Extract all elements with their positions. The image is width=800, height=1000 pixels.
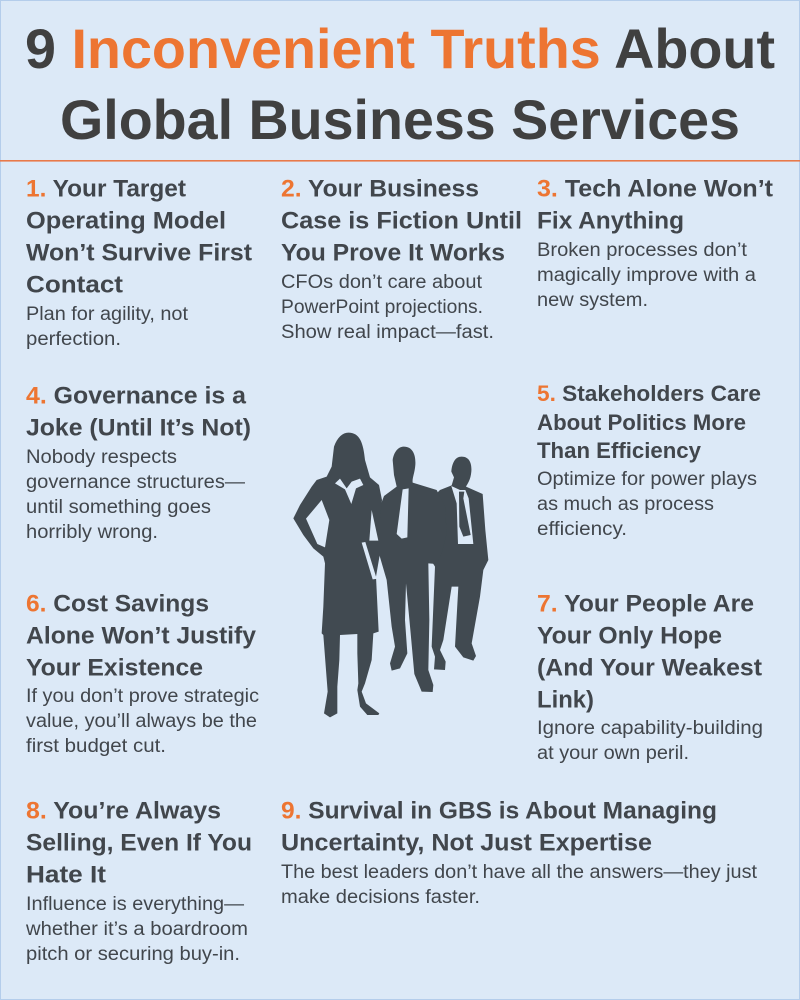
truth 2: You Prove It Works [281, 240, 505, 267]
title [25, 17, 775, 151]
right man's shirt and tie [451, 486, 473, 544]
truth 4: Nobody respects [26, 447, 177, 468]
woman's arm gap [369, 510, 378, 541]
truth 5 [537, 381, 761, 540]
truth 3 [537, 176, 773, 311]
truth 5: as much as process [537, 494, 714, 515]
truth 9: 9. Survival in GBS is About Managing [281, 798, 717, 825]
truth 6: 6. Cost Savings [26, 591, 209, 618]
truth 7 [537, 591, 763, 764]
truth 8: whether it’s a boardroom [25, 919, 248, 940]
truth 8: pitch or securing buy-in. [26, 944, 240, 965]
truth 2 [281, 176, 522, 343]
truth 2: 2. Your Business [281, 176, 479, 203]
truth 8: Hate It [26, 862, 106, 889]
truth 6: value, you’ll always be the [26, 711, 257, 732]
truth 7: Ignore capability-building [537, 718, 763, 739]
truth 1: Plan for agility, not [26, 304, 189, 325]
figure: woman in front [293, 433, 382, 717]
figure: man at back right [427, 457, 488, 670]
truth 1: Contact [26, 272, 123, 299]
truth 7: Link) [537, 687, 594, 714]
truth 8: Influence is everything— [26, 894, 244, 915]
truth 2: Case is Fiction Until [281, 208, 522, 235]
truth 6 [26, 591, 259, 757]
truth 4: governance structures— [26, 472, 245, 493]
centre man's tie [397, 488, 409, 539]
truth 5: Optimize for power plays [537, 469, 757, 490]
truth 4: horribly wrong. [26, 522, 158, 543]
truth 3: Broken processes don’t [537, 240, 748, 261]
truth 3: 3. Tech Alone Won’t [537, 176, 773, 203]
truth 4: Joke (Until It’s Not) [26, 415, 251, 442]
truth 7: at your own peril. [537, 743, 689, 764]
truth 8 [25, 798, 252, 965]
truth 3: new system. [537, 290, 648, 311]
truth 7: 7. Your People Are [537, 591, 754, 618]
truth 3: Fix Anything [537, 208, 684, 235]
truth 1: Won’t Survive First [26, 240, 252, 267]
figure: man in centre [375, 447, 447, 692]
folder edge [362, 542, 385, 579]
truth 3: magically improve with a [537, 265, 756, 286]
truth 2: CFOs don’t care about [281, 272, 483, 293]
truth 1: 1. Your Target [26, 176, 186, 203]
truth 4 [26, 383, 251, 543]
truth 6: first budget cut. [26, 736, 166, 757]
truth 2: PowerPoint projections. [281, 297, 483, 318]
truth 8: 8. You’re Always [26, 798, 221, 825]
truth 5: About Politics More [537, 410, 746, 435]
title: 9 Inconvenient Truths About [25, 17, 775, 80]
truth 5: Than Efficiency [537, 438, 701, 463]
truth 5: efficiency. [537, 519, 627, 540]
truth 4: until something goes [26, 497, 211, 518]
truth 9: make decisions faster. [281, 887, 480, 908]
truth 5: 5. Stakeholders Care [537, 381, 761, 406]
woman's collar [335, 479, 363, 504]
truth 1: Operating Model [26, 208, 226, 235]
truth 6: If you don’t prove strategic [26, 686, 259, 707]
truth 2: Show real impact—fast. [281, 322, 494, 343]
truth 1: perfection. [26, 329, 121, 350]
truth 6: Your Existence [26, 655, 203, 682]
truth 6: Alone Won’t Justify [26, 623, 256, 650]
truth 4: 4. Governance is a [26, 383, 246, 410]
truth 9: The best leaders don’t have all the answers—they just [281, 862, 758, 883]
truth 7: (And Your Weakest [537, 655, 762, 682]
truth 7: Your Only Hope [537, 623, 722, 650]
truth 9 [281, 798, 758, 908]
illustration: business people silhouette [293, 433, 488, 717]
truth 9: Uncertainty, Not Just Expertise [281, 830, 652, 857]
truth 1 [26, 176, 252, 350]
title: Global Business Services [60, 88, 740, 151]
truth 8: Selling, Even If You [26, 830, 252, 857]
